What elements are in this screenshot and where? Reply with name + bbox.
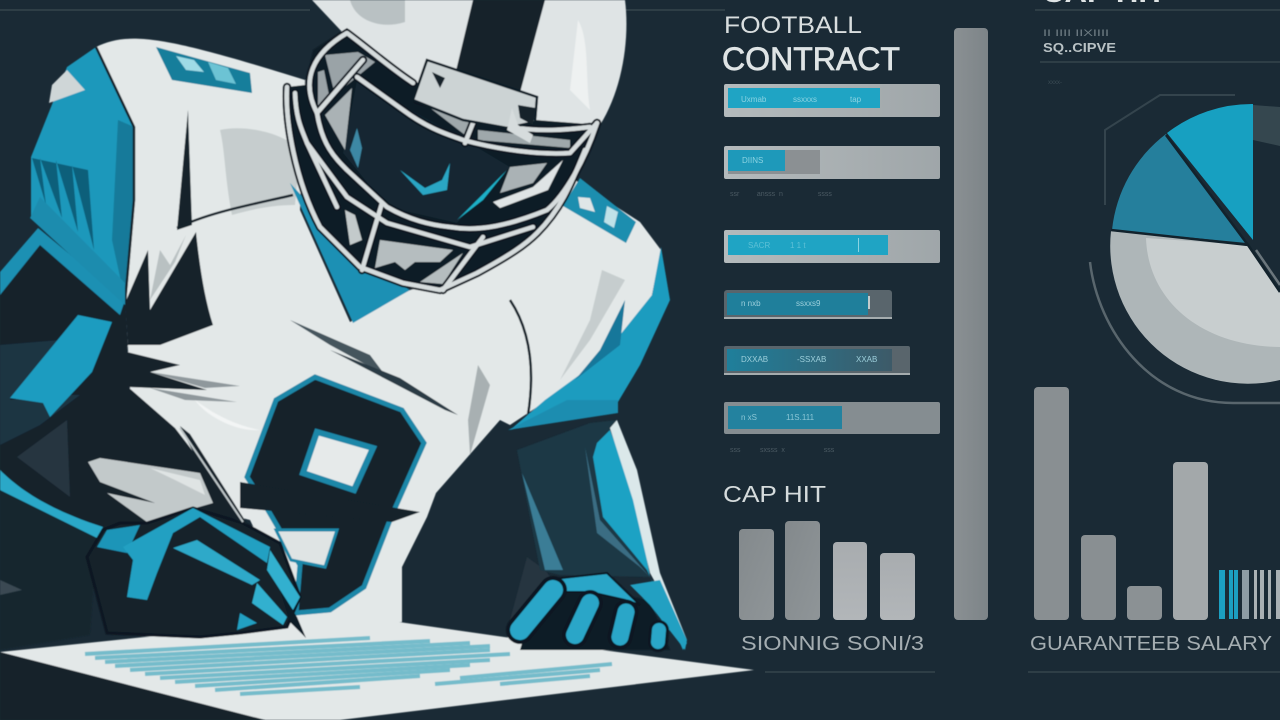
pen <box>180 426 306 638</box>
left shoulder number patch <box>156 47 252 93</box>
pie slice: mid teal <box>1112 134 1247 243</box>
bar 4 <box>724 290 892 319</box>
contract value bars <box>724 84 940 454</box>
right hand <box>520 573 687 650</box>
right sleeve <box>508 247 670 430</box>
facemask backing <box>287 28 600 290</box>
pie slice: top right dark <box>1250 105 1280 290</box>
bar 6: 11S.111 <box>786 413 815 422</box>
bar 4: n nxb <box>741 299 761 308</box>
pie chart <box>1090 95 1280 403</box>
torso jersey <box>88 39 661 625</box>
bar 5: DXXAB <box>741 355 768 364</box>
bar 3: 1 1 t <box>790 241 806 250</box>
salary caption: xxxx- <box>1048 80 1062 86</box>
salary caption: SQ..CIPVE <box>1043 40 1116 55</box>
shadow area left of torso <box>0 300 243 530</box>
facemask bars outline <box>287 33 597 290</box>
right shoulder number patch <box>563 178 636 243</box>
left sleeve <box>30 47 134 305</box>
pie slice: bright teal <box>1167 104 1253 240</box>
dashboard title: CONTRACT <box>722 41 900 77</box>
collar <box>290 183 410 323</box>
salary caption: II IIII IIXIIII <box>1043 28 1109 38</box>
left arm <box>0 228 128 650</box>
dashboard title: FOOTBALL <box>724 12 862 39</box>
bar 3: SACR <box>748 241 770 250</box>
bar 5 <box>724 346 910 375</box>
bar 6: n xS <box>741 413 757 422</box>
writing hand <box>87 508 300 637</box>
bar 1: ssxxxs <box>793 95 817 104</box>
right hand fingers <box>520 590 659 642</box>
facemask bars <box>287 33 597 290</box>
pie slice: grey <box>1110 231 1280 384</box>
signing bonus label: SIONNIG SONI/3 <box>741 633 924 655</box>
bar 2 caption: ssr ansss n ssss <box>730 191 832 198</box>
pie outer ring <box>1090 262 1280 403</box>
bar 1 <box>724 84 940 117</box>
helmet bumper <box>413 60 537 143</box>
bar 4: ssxxs9 <box>796 299 821 308</box>
striped bars <box>1219 570 1280 619</box>
tall vertical bar <box>954 28 988 620</box>
illustration: football player signing contract <box>0 0 754 720</box>
bar 1: Uxmab <box>741 95 767 104</box>
jersey number 8 <box>240 377 424 613</box>
bar 2: DIINS <box>742 156 763 165</box>
bar 6 caption: sss sxsss x sss <box>730 447 835 454</box>
helmet shell <box>312 0 626 130</box>
bar 5: XXAB <box>856 355 877 364</box>
cap hit heading: CAP HIT <box>723 481 826 507</box>
bar 5: -SSXAB <box>797 355 826 364</box>
pie slice: inner light <box>1146 238 1280 347</box>
right forearm <box>510 420 687 650</box>
bar 1: tap <box>850 95 862 104</box>
pie frame <box>1105 95 1235 205</box>
guaranteed salary label: GUARANTEEB SALARY <box>1030 633 1272 655</box>
salary caption <box>1043 28 1116 86</box>
guaranteed salary bar chart <box>1034 387 1208 620</box>
pie divider lines <box>1111 135 1280 292</box>
bar 2 <box>724 146 940 179</box>
bar 3 <box>724 230 940 263</box>
signing bonus bar chart <box>739 521 915 620</box>
dashboard title <box>722 12 900 77</box>
bar 6 <box>724 402 940 434</box>
contract paper <box>0 620 754 720</box>
lower jersey folds <box>88 458 213 522</box>
contract text lines <box>85 638 612 694</box>
